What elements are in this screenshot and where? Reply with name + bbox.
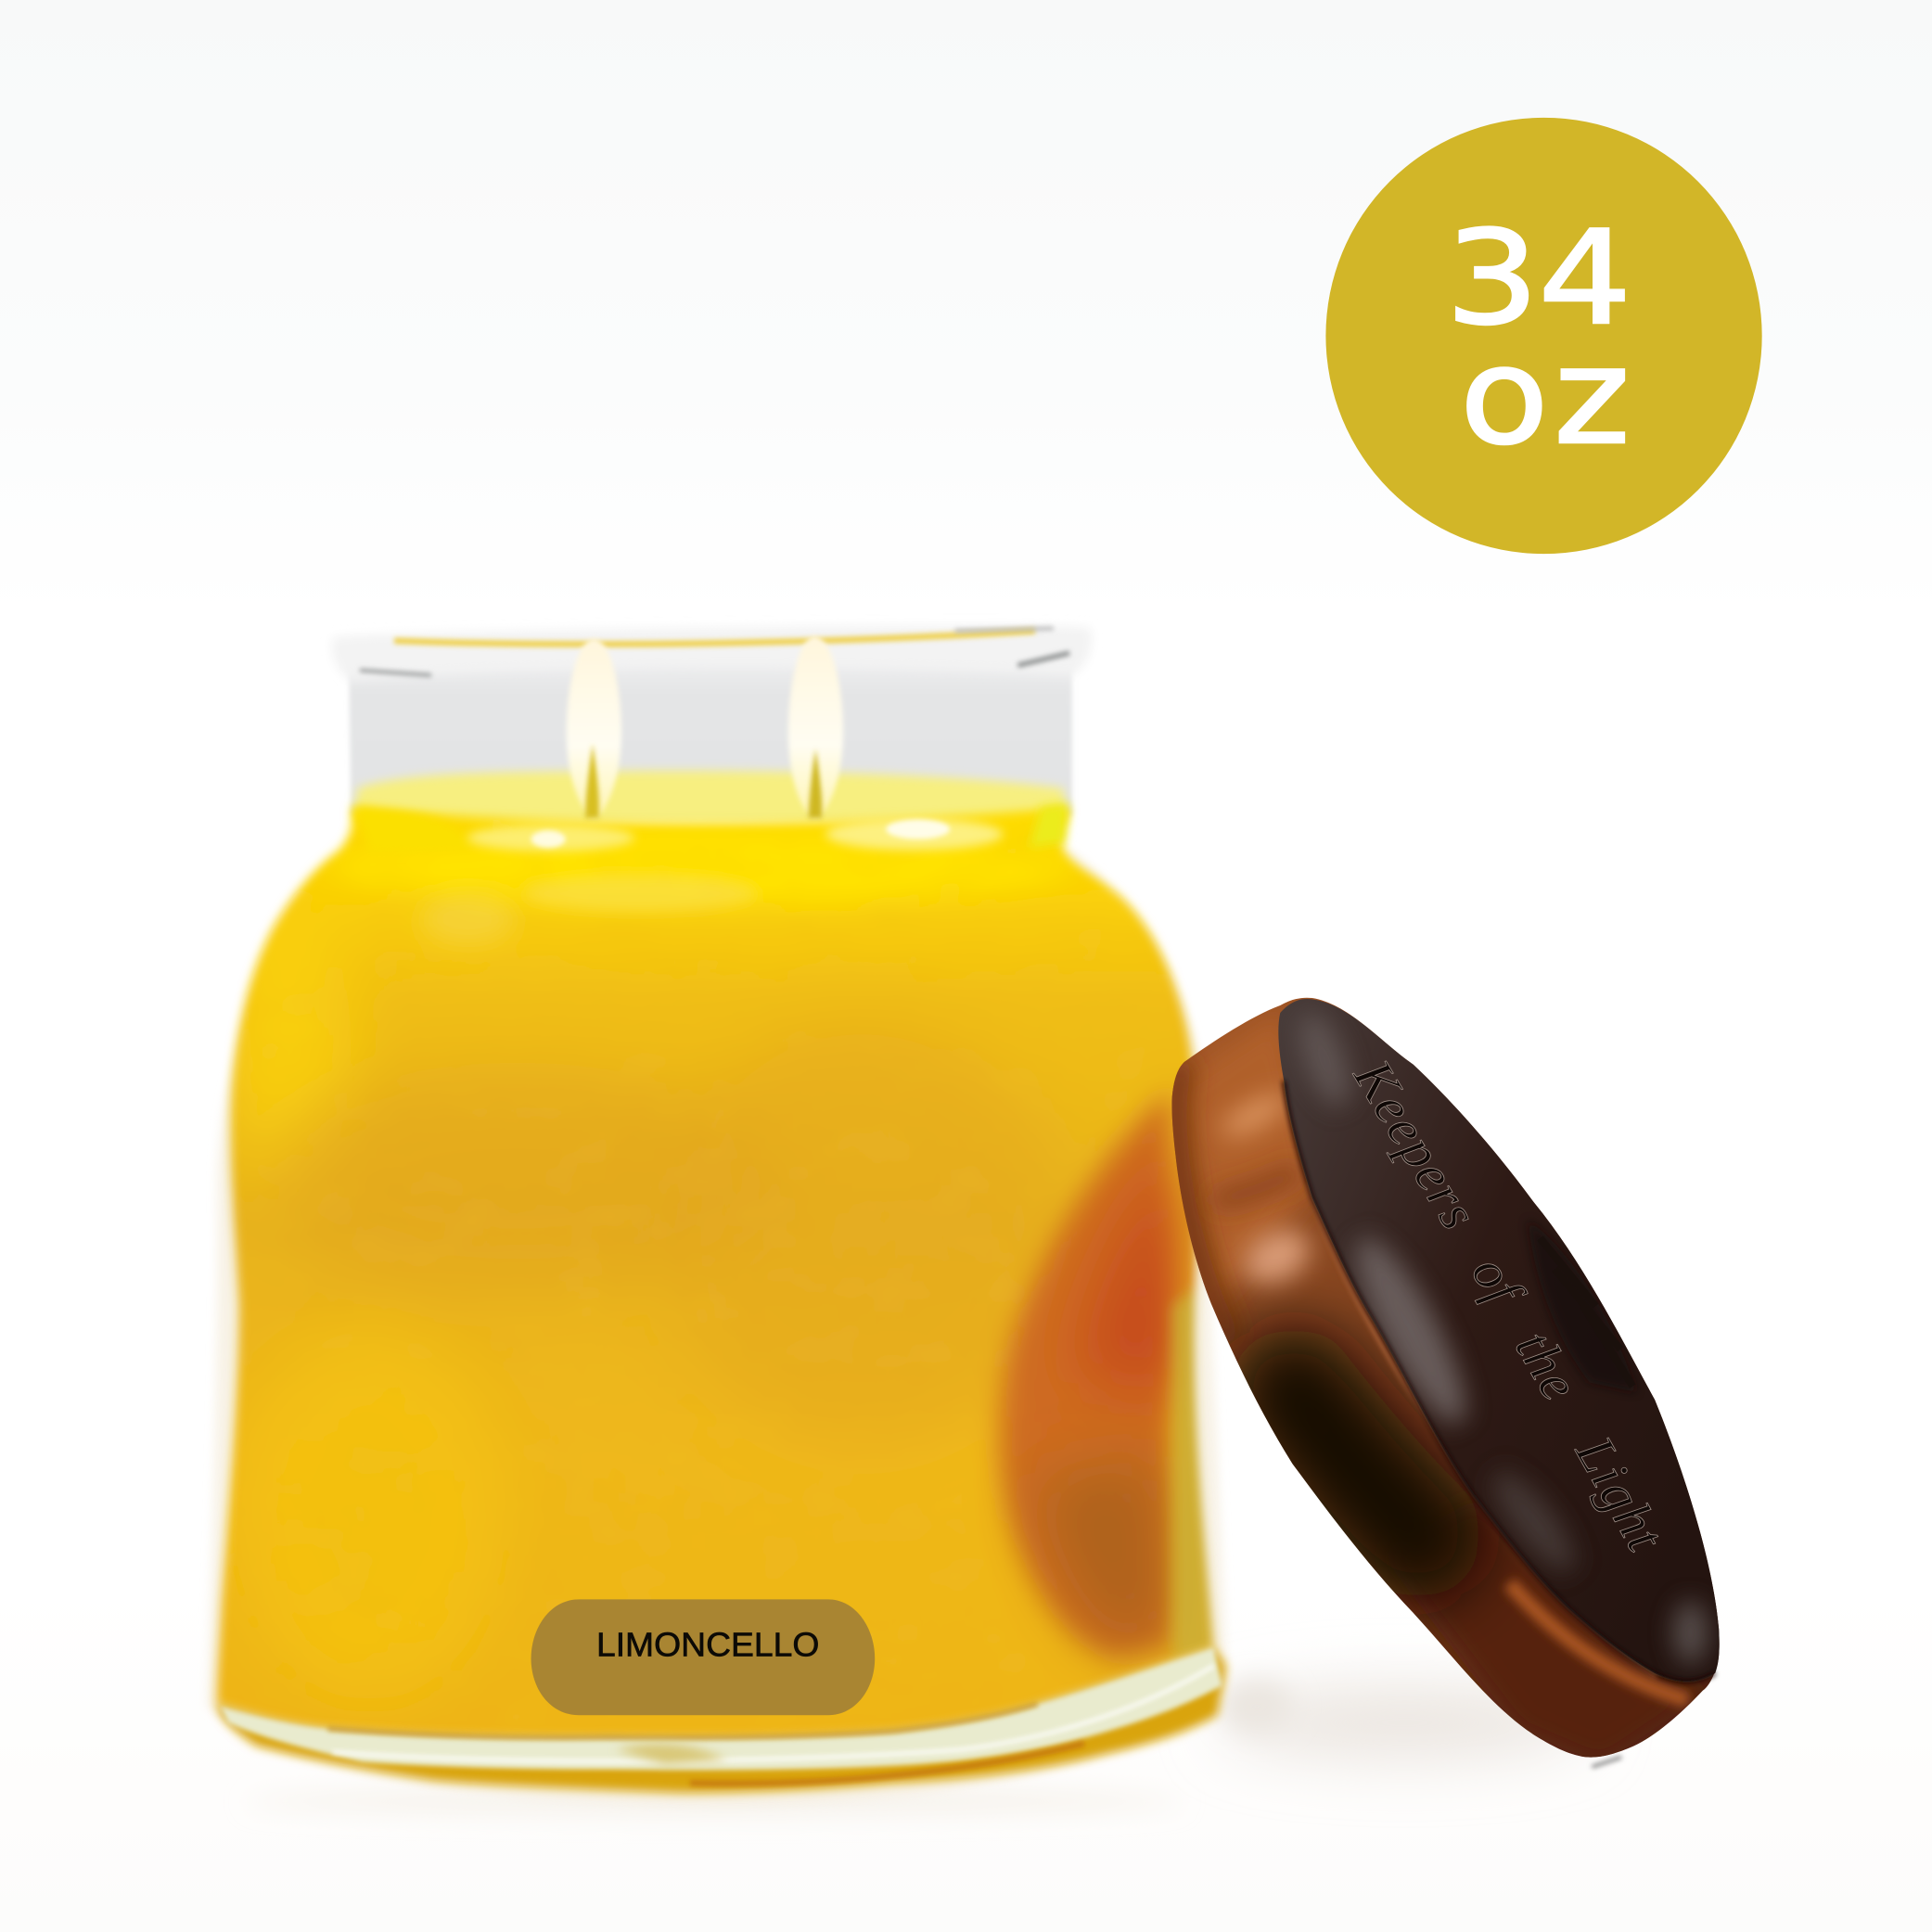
leaning lid	[1171, 998, 1720, 1758]
dark outer edge	[1177, 1062, 1232, 1343]
warm orange cloud	[259, 1072, 776, 1294]
flame right	[788, 635, 843, 818]
wax body	[198, 788, 1232, 1749]
right edge pale yellow	[1173, 1282, 1215, 1661]
candle jar	[198, 626, 1232, 1805]
label text: LIMONCELLO	[596, 1626, 819, 1663]
lid face rim line	[1284, 1081, 1715, 1682]
copper lid rim	[1158, 986, 1737, 1774]
jar rim	[332, 626, 1092, 680]
dark lid face	[1278, 999, 1720, 1682]
wick left	[585, 744, 599, 818]
product photo canvas	[204, 117, 1762, 1822]
dark band	[1294, 1392, 1417, 1534]
melt pool left	[467, 825, 634, 851]
wax top surface	[353, 771, 1067, 823]
wick right	[808, 749, 822, 818]
flame left	[567, 638, 621, 818]
pale wax streaks	[524, 875, 758, 912]
floor shadow	[247, 1680, 1621, 1813]
lower left yellow	[234, 1331, 505, 1700]
wax surface front edge highlights	[355, 803, 1067, 852]
jar neck glass	[349, 653, 1072, 815]
jar base glass	[217, 1647, 1226, 1793]
bright inner edge	[1309, 1183, 1657, 1676]
size badge: 34 oz	[1325, 118, 1762, 554]
embossed lid lettering: Keepers of the Light	[1352, 1061, 1658, 1553]
jar glass halo	[207, 851, 1227, 1805]
embossed logo	[1528, 1220, 1636, 1392]
bright left shoulder	[228, 900, 352, 1196]
upper bright band	[333, 832, 1072, 905]
badge unit: oz	[1460, 320, 1630, 474]
badge number: 34	[1445, 203, 1631, 354]
badge circle	[1325, 118, 1762, 554]
scent label	[531, 1599, 875, 1715]
melt pool right	[825, 818, 1003, 851]
reflection of copper lid	[999, 1084, 1177, 1657]
lower brown section	[1399, 1506, 1703, 1758]
